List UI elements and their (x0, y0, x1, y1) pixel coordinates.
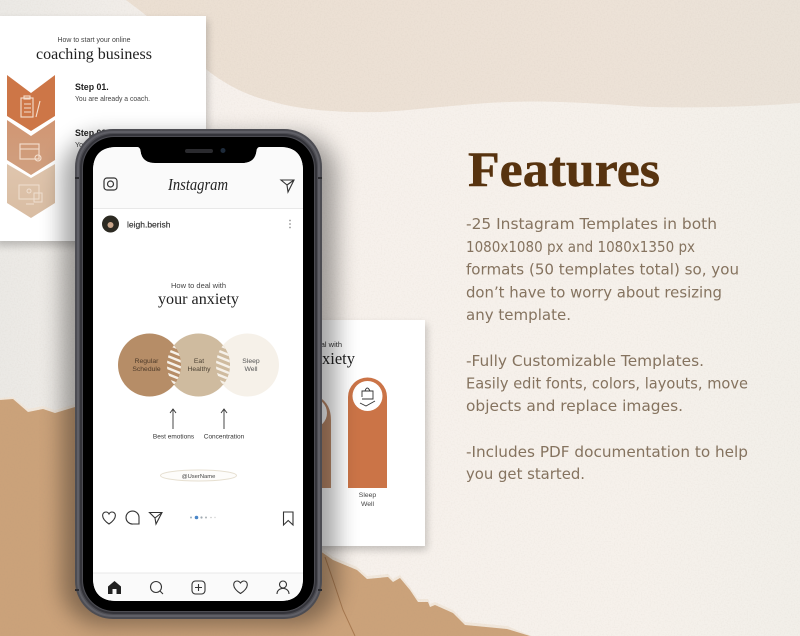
step 1 text: You are already a coach. (75, 94, 150, 103)
venn diagram: Healthy (187, 366, 211, 373)
chevron 1 (7, 75, 55, 131)
icon: add (192, 581, 205, 594)
features text: any template. (466, 306, 571, 324)
username: leigh.berish (127, 220, 171, 230)
icon: like (103, 512, 115, 524)
features text (466, 215, 748, 483)
side buttons (75, 178, 322, 590)
icon: hand with bag (360, 388, 375, 406)
post title large: your anxiety (158, 291, 239, 308)
tab bar (93, 579, 303, 601)
sleep label: Sleep (359, 492, 376, 499)
app header (93, 147, 303, 170)
label: concentration: Concentration (204, 434, 245, 440)
arrow left (170, 409, 176, 429)
card title small: How to start your online (58, 35, 130, 44)
card: sleep well (297, 320, 425, 546)
label: sleep well: Sleep (242, 358, 260, 365)
label: eat healthy: Eat (194, 358, 204, 365)
arrow right (221, 409, 227, 429)
card title large: coaching business (36, 46, 152, 63)
circle: eat healthy (167, 334, 230, 396)
icon: comment (126, 511, 139, 524)
features text: formats (50 templates total) so, you (466, 260, 739, 278)
step 2 text: You are (75, 140, 100, 149)
label: regular schedule: Regular (135, 358, 159, 365)
card background (0, 16, 206, 241)
icon: bookmark (284, 512, 293, 525)
torn white edge (0, 397, 532, 636)
card: coaching business (0, 16, 206, 241)
features text: Easily edit fonts, colors, layouts, move (466, 374, 748, 392)
instagram wordmark: Instagram (167, 175, 228, 194)
icon: share (150, 512, 162, 524)
icon: profile (277, 581, 289, 594)
notch details (185, 149, 213, 153)
stripes right (216, 346, 230, 384)
phone shadow (62, 135, 337, 625)
circle: sleep well (216, 334, 279, 396)
avatar (102, 216, 119, 232)
pill icon circle (352, 381, 382, 411)
chevron 2 (7, 120, 55, 175)
phone frame (75, 129, 322, 619)
venn diagram: Well (244, 366, 258, 373)
card background (300, 320, 425, 546)
username pill (160, 470, 236, 481)
icon: clipboard (21, 96, 40, 117)
card title small: al with (321, 340, 342, 349)
features text: -25 Instagram Templates in both (466, 215, 717, 233)
crease (325, 557, 355, 636)
icon: browser (20, 144, 41, 161)
kraft paper (0, 399, 530, 636)
phone (75, 129, 322, 619)
card shadows (0, 20, 427, 550)
screen (93, 147, 303, 601)
icon: home (108, 581, 121, 594)
partial pill circle (297, 398, 327, 428)
icon: search (150, 582, 163, 594)
chevron 3 (7, 164, 55, 218)
post title small: How to deal with (171, 281, 226, 290)
icon: heart (234, 581, 247, 594)
features text: you get started. (466, 465, 585, 483)
label: best emotions: Best emotions (153, 434, 195, 440)
step 2 heading: Step 02. (75, 128, 109, 138)
circle: regular schedule (118, 334, 181, 396)
step 1 heading: Step 01. (75, 82, 109, 92)
features text: -Includes PDF documentation to help (466, 443, 748, 461)
carousel dots (190, 516, 216, 519)
features heading: Features (468, 141, 660, 197)
venn diagram: Schedule (132, 366, 161, 373)
icon: more dots (289, 220, 291, 228)
card title large: xiety (322, 349, 356, 368)
features text: don’t have to worry about resizing (466, 284, 722, 302)
features text: -Fully Customizable Templates. (466, 352, 704, 370)
stripes left (167, 346, 181, 384)
orange pill (348, 378, 387, 488)
features text: 1080x1080 px and 1080x1350 px (466, 238, 695, 256)
venn diagram (118, 334, 279, 396)
icon: monitor (19, 185, 42, 204)
username pill text: @UserName (182, 474, 215, 480)
well label: Well (361, 501, 375, 508)
icon: camera (104, 178, 117, 190)
partial pill (300, 397, 331, 488)
beige paper shape (126, 0, 800, 112)
icon: direct (281, 180, 294, 192)
features text: objects and replace images. (466, 397, 683, 415)
